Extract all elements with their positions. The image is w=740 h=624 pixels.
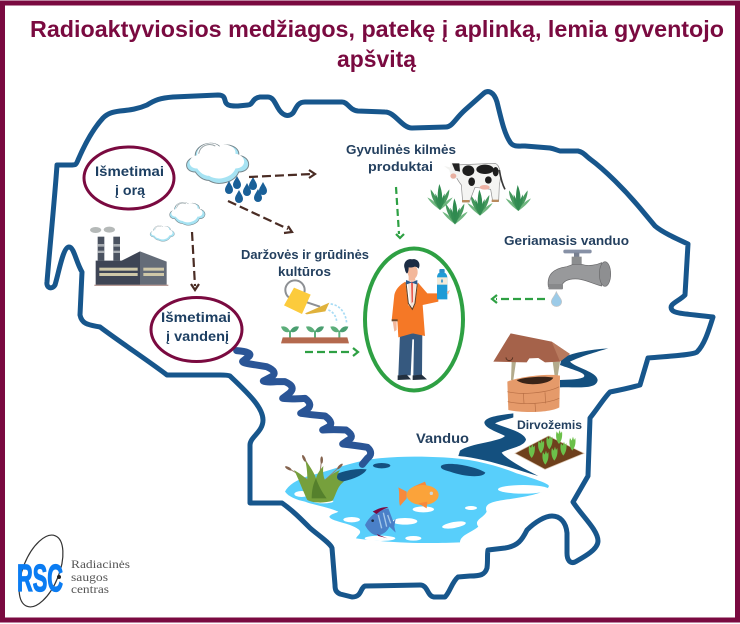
icon: reeds and grass xyxy=(284,454,344,503)
icon: goldfish xyxy=(398,482,439,508)
icon: person holding water bottle xyxy=(392,259,450,380)
bow tie xyxy=(406,280,417,285)
callout: emissions to air: Išmetimai xyxy=(95,163,164,179)
small clouds over factory xyxy=(150,202,205,241)
icon: watering can and seedlings xyxy=(281,280,349,343)
neck and face xyxy=(409,273,415,281)
label: vegetables and grain crops: kultūros xyxy=(278,264,331,279)
callout: emissions to air xyxy=(84,147,174,209)
logo: Radiacinės saugos centras xyxy=(10,529,130,613)
circle around person xyxy=(365,248,463,390)
label: animal products: produktai xyxy=(368,159,433,174)
callout: emissions to water: į vandenį xyxy=(166,328,229,344)
callout: emissions to water xyxy=(151,298,242,362)
logo letters: RSC xyxy=(17,558,63,600)
pond dark ovals xyxy=(325,463,485,483)
icon: striped blue fish xyxy=(365,507,396,538)
dark river behind the well xyxy=(458,348,608,476)
icon: cow xyxy=(444,163,505,202)
hair xyxy=(404,259,420,273)
bottle xyxy=(439,269,445,273)
title xyxy=(30,16,724,72)
callout: emissions to air: į orą xyxy=(115,182,145,198)
label: soil: Dirvožemis xyxy=(517,418,582,432)
label: water: Vanduo xyxy=(416,430,469,446)
logo text: Radiacinės xyxy=(71,557,130,571)
label: drinking water: Geriamasis vanduo xyxy=(504,233,629,248)
pond xyxy=(285,457,549,543)
trousers xyxy=(398,333,422,375)
logo text: saugos xyxy=(71,570,108,584)
title: apšvitą xyxy=(337,46,416,72)
logo ellipse xyxy=(10,529,72,613)
label: animal products xyxy=(346,142,456,174)
label: animal products: Gyvulinės kilmės xyxy=(346,142,456,157)
icon: grass tufts xyxy=(427,184,531,224)
wavy river from water emissions to pond xyxy=(237,351,371,464)
icon: soil plot with sprouts xyxy=(515,430,584,469)
label: vegetables and grain crops: Daržovės ir grūdinės xyxy=(241,247,369,262)
icon: water well xyxy=(493,333,570,412)
rain drops xyxy=(225,176,267,203)
pond white highlights xyxy=(294,485,549,541)
jacket xyxy=(392,282,438,337)
arrow: crops to person xyxy=(305,348,358,356)
arrow: drinking water to person xyxy=(492,295,545,303)
shirt xyxy=(407,280,416,307)
logo text xyxy=(71,557,130,596)
cloud and rain xyxy=(187,143,267,203)
label: vegetables and grain crops xyxy=(241,247,369,279)
callout: emissions to water: Išmetimai xyxy=(161,309,231,325)
arrow: air to water emissions xyxy=(191,232,199,290)
icon: water tap xyxy=(548,250,611,306)
map outline of Lithuania xyxy=(47,92,713,597)
icon: factory xyxy=(90,227,168,286)
arrow: cloud to crops xyxy=(228,201,292,233)
shoes xyxy=(398,375,411,380)
arrow: cloud to animal products xyxy=(249,170,315,178)
arrow: animal products to person xyxy=(396,187,404,238)
logo text: centras xyxy=(71,582,109,596)
title: Radioaktyviosios medžiagos, patekę į aplinką, lemia gyventojo xyxy=(30,16,724,42)
